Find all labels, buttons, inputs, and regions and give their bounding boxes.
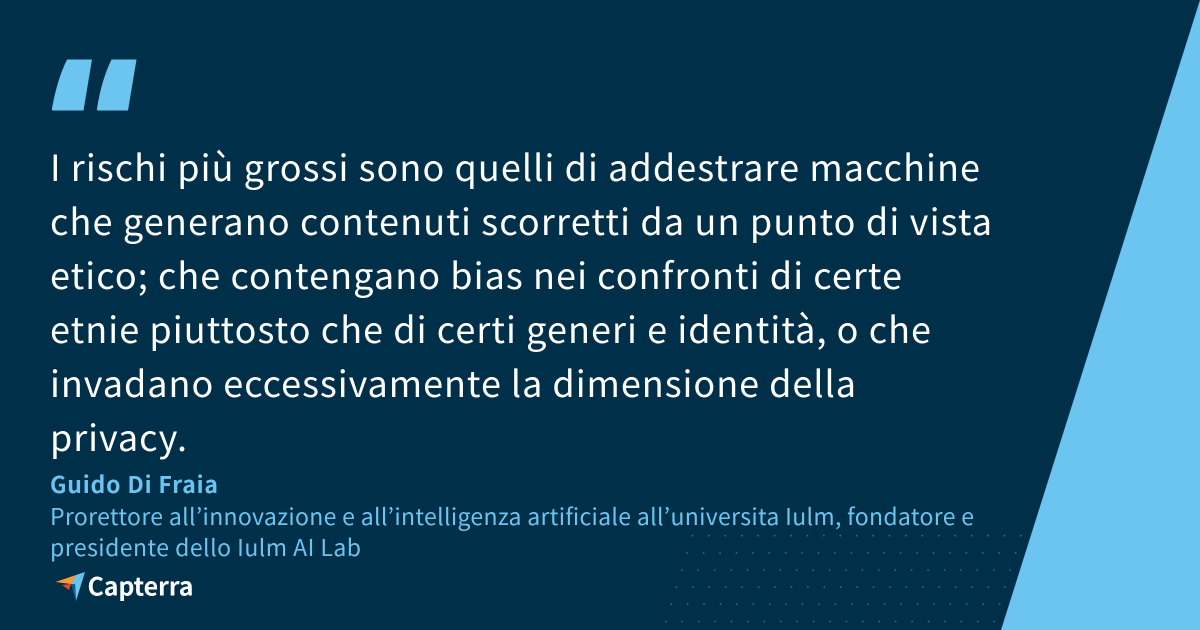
quote text: etnie piuttosto che di certi generi e identità, o che bbox=[50, 302, 931, 354]
right blue wedge bbox=[1001, 0, 1200, 630]
quote text: che generano contenuti scorretti da un punto di vista bbox=[50, 194, 992, 246]
icon: capterra arrow bbox=[56, 572, 85, 601]
attribution role bbox=[50, 498, 974, 563]
quote text: I rischi più grossi sono quelli di addestrare macchine bbox=[50, 140, 980, 192]
icon: quotation marks bbox=[52, 60, 136, 110]
attribution name: Guido Di Fraia bbox=[50, 466, 218, 500]
attribution role: presidente dello Iulm AI Lab bbox=[50, 529, 361, 563]
quote text: privacy. bbox=[50, 410, 187, 462]
wordmark: Capterra bbox=[88, 568, 194, 604]
dot pattern bbox=[666, 536, 1022, 622]
quote text: invadano eccessivamente la dimensione della bbox=[50, 356, 856, 408]
capterra logo bbox=[56, 568, 194, 604]
quote text: etico; che contengano bias nei confronti di certe bbox=[50, 248, 902, 300]
attribution role: Prorettore all’innovazione e all’intelligenza artificiale all’universita Iulm, fondatore e bbox=[50, 498, 974, 532]
quote text bbox=[50, 140, 992, 462]
